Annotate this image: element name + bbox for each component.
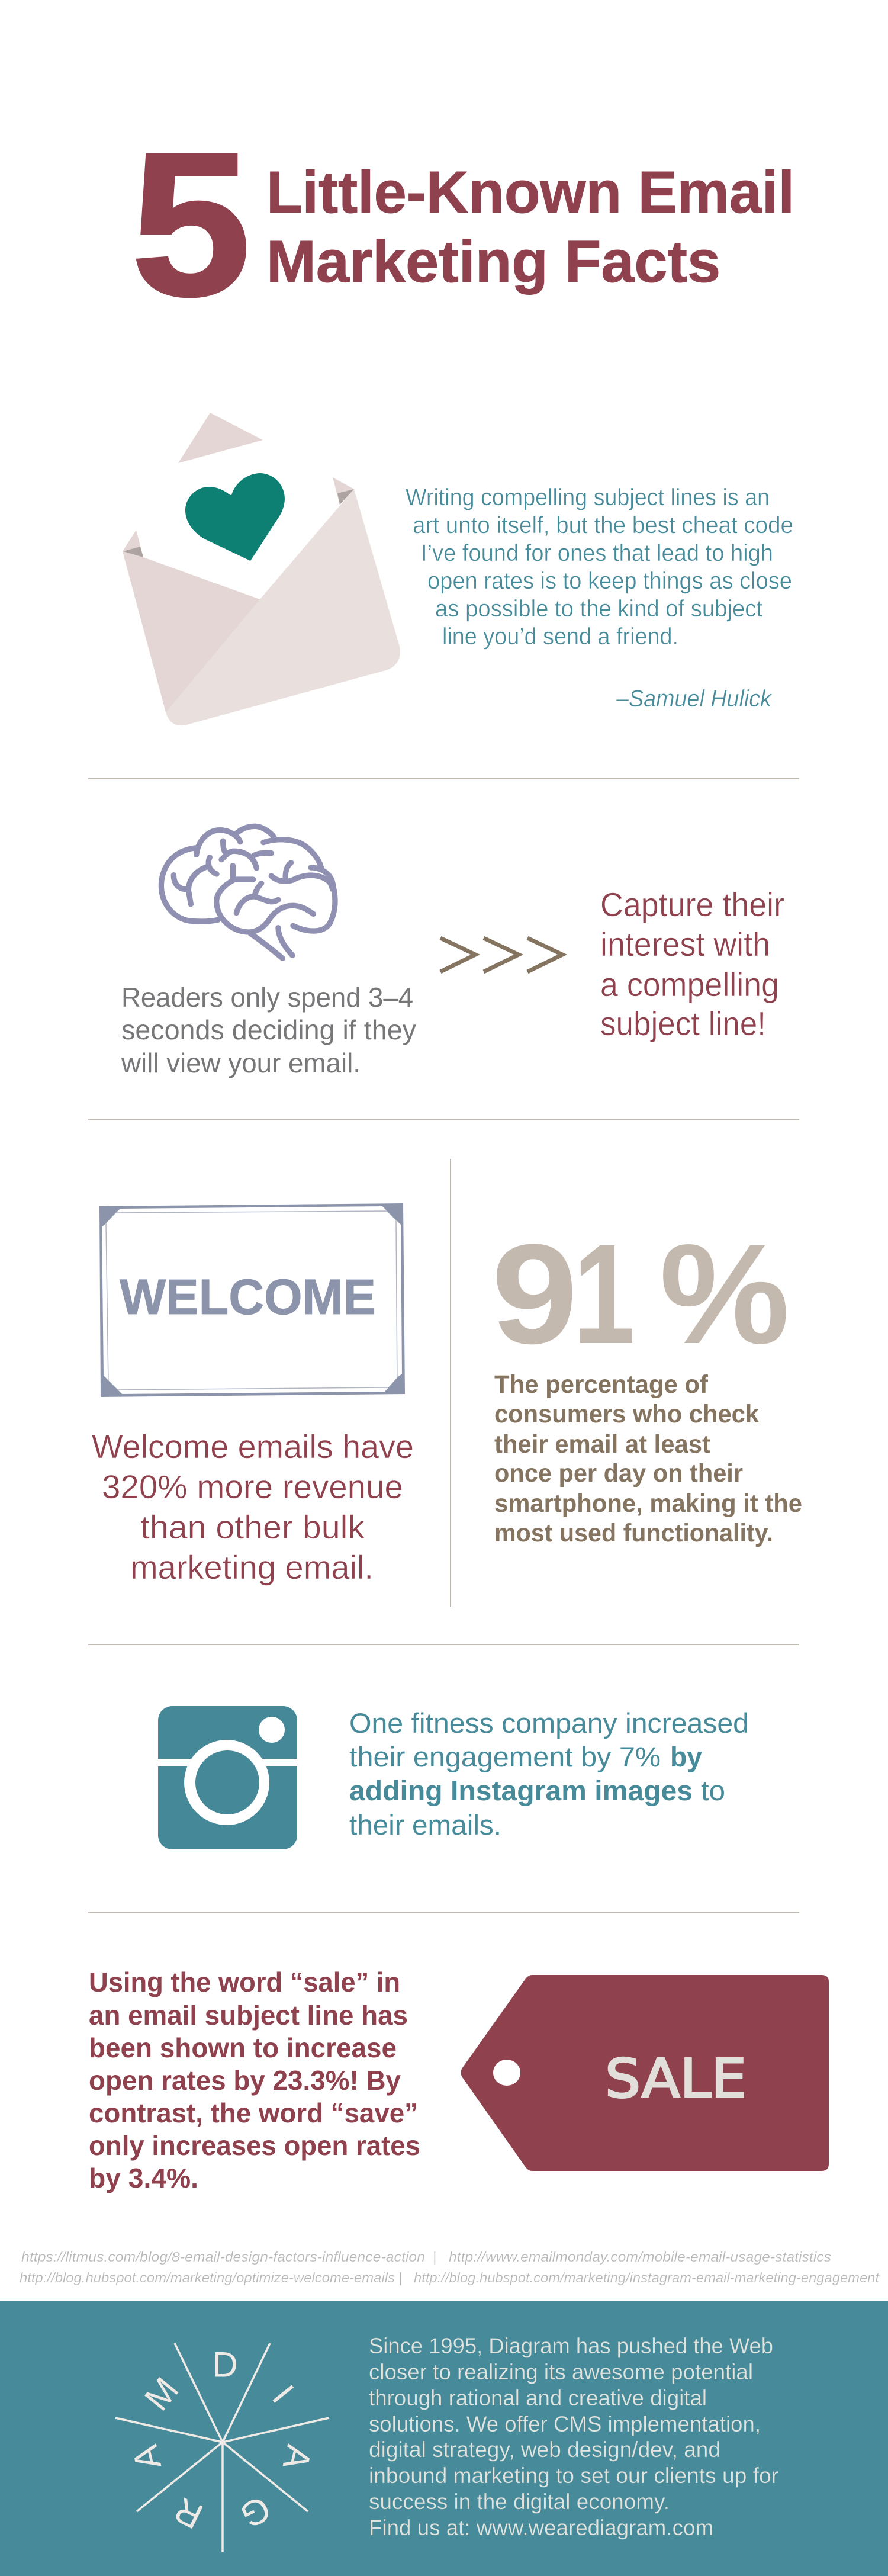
footer text: through rational and creative digital <box>369 2386 707 2410</box>
tag word: SALE <box>605 2048 747 2110</box>
readers text: Readers only spend 3–4 <box>121 982 413 1013</box>
logo: Diagram wheel: A <box>275 2442 319 2474</box>
quote text: line you’d send a friend. <box>442 624 678 650</box>
readers text: will view your email. <box>121 1048 361 1078</box>
welcome text: marketing email. <box>130 1549 374 1586</box>
welcome text: than other bulk <box>140 1508 365 1546</box>
capture text <box>600 886 784 1043</box>
panel: subject line <box>121 826 784 1078</box>
welcome text: Welcome emails have <box>92 1428 414 1465</box>
big stat <box>491 1215 790 1373</box>
capture text: Capture their <box>600 886 784 924</box>
big stat: % <box>659 1215 790 1373</box>
instagram text <box>349 1707 749 1841</box>
sale text: contrast, the word “save” <box>89 2098 418 2128</box>
panel: quote <box>123 413 793 725</box>
stat description <box>494 1370 802 1547</box>
footer text: success in the digital economy. <box>369 2490 670 2514</box>
quote text: Writing compelling subject lines is an <box>406 484 770 510</box>
panel: sale <box>89 1967 829 2193</box>
footer background <box>0 2301 888 2576</box>
icon: welcome card <box>99 1203 405 1397</box>
readers text: seconds deciding if they <box>121 1014 416 1045</box>
source links: http://blog.hubspot.com/marketing/instagram-email-marketing-engagement <box>414 2270 880 2285</box>
big stat: 9 <box>491 1215 578 1373</box>
stat description: most used functionality. <box>494 1519 773 1547</box>
capture text: interest with <box>600 926 770 963</box>
stat description: their email at least <box>494 1430 710 1459</box>
panel: instagram <box>158 1706 749 1849</box>
sale text: by 3.4%. <box>89 2163 198 2193</box>
panel: 91 percent <box>491 1215 802 1547</box>
stat description: once per day on their <box>494 1459 743 1488</box>
arrow: triple chevron <box>440 938 562 972</box>
instagram text: by <box>670 1741 702 1772</box>
logo: Diagram wheel: R <box>168 2490 209 2537</box>
panel: footer <box>0 2301 888 2576</box>
logo: Diagram wheel: I <box>265 2378 302 2410</box>
stat description: smartphone, making it the <box>494 1489 802 1518</box>
sale text: only increases open rates <box>89 2130 420 2161</box>
icon: sale tag <box>461 1975 829 2171</box>
quote text: open rates is to keep things as close <box>427 568 792 594</box>
logo: Diagram wheel: A <box>125 2442 169 2474</box>
logo: Diagram wheel: G <box>234 2488 276 2536</box>
source links: http://www.emailmonday.com/mobile-email-usage-statistics <box>449 2249 831 2265</box>
icon: brain <box>161 826 335 958</box>
capture text: a compelling <box>600 966 779 1004</box>
source links <box>20 2249 880 2285</box>
title text: Marketing Facts <box>266 229 720 295</box>
sale text: Using the word “sale” in <box>89 1967 400 1997</box>
instagram text: adding Instagram images <box>349 1775 693 1806</box>
title text <box>266 159 794 295</box>
footer text: closer to realizing its awesome potential <box>369 2360 753 2384</box>
logo: Diagram wheel: M <box>137 2370 186 2418</box>
sale text: an email subject line has <box>89 2000 408 2031</box>
footer text: digital strategy, web design/dev, and <box>369 2437 720 2462</box>
title text: Little-Known Email <box>266 159 794 226</box>
quote text <box>406 484 793 650</box>
readers text <box>121 982 416 1078</box>
quote text: as possible to the kind of subject <box>435 596 762 622</box>
welcome text: 320% more revenue <box>102 1468 403 1505</box>
footer text: inbound marketing to set our clients up for <box>369 2463 778 2488</box>
instagram text: their engagement by 7% <box>349 1741 661 1772</box>
big numeral 5: 5 <box>131 111 251 339</box>
icon: instagram camera <box>158 1706 297 1849</box>
source links: | <box>398 2270 402 2285</box>
card word: WELCOME <box>120 1269 376 1325</box>
big stat: 1 <box>573 1215 635 1373</box>
welcome text <box>92 1428 414 1586</box>
sale text <box>89 1967 420 2193</box>
quote text: art unto itself, but the best cheat code <box>413 512 793 538</box>
footer text: solutions. We offer CMS implementation, <box>369 2412 761 2436</box>
sale text: open rates by 23.3%! By <box>89 2065 401 2096</box>
quote text: I’ve found for ones that lead to high <box>421 540 773 566</box>
icon: envelope with heart <box>123 413 400 725</box>
footer text: Since 1995, Diagram has pushed the Web <box>369 2334 773 2358</box>
logo: Diagram wheel: D <box>212 2345 238 2384</box>
source links: | <box>433 2249 436 2265</box>
footer text: Find us at: www.wearediagram.com <box>369 2516 713 2540</box>
stat description: consumers who check <box>494 1400 759 1428</box>
instagram text: to <box>701 1775 725 1806</box>
title <box>131 111 794 339</box>
sale text: been shown to increase <box>89 2032 397 2063</box>
instagram text: One fitness company increased <box>349 1707 749 1739</box>
quote attribution: –Samuel Hulick <box>616 686 773 712</box>
source links: http://blog.hubspot.com/marketing/optimize-welcome-emails <box>20 2270 395 2285</box>
footer text <box>369 2334 778 2540</box>
source links: https://litmus.com/blog/8-email-design-factors-influence-action <box>21 2249 425 2265</box>
stat description: The percentage of <box>494 1370 709 1399</box>
capture text: subject line! <box>600 1005 766 1043</box>
instagram text: their emails. <box>349 1809 501 1841</box>
logo: Diagram wheel <box>115 2343 329 2552</box>
panel: welcome emails <box>92 1203 414 1586</box>
